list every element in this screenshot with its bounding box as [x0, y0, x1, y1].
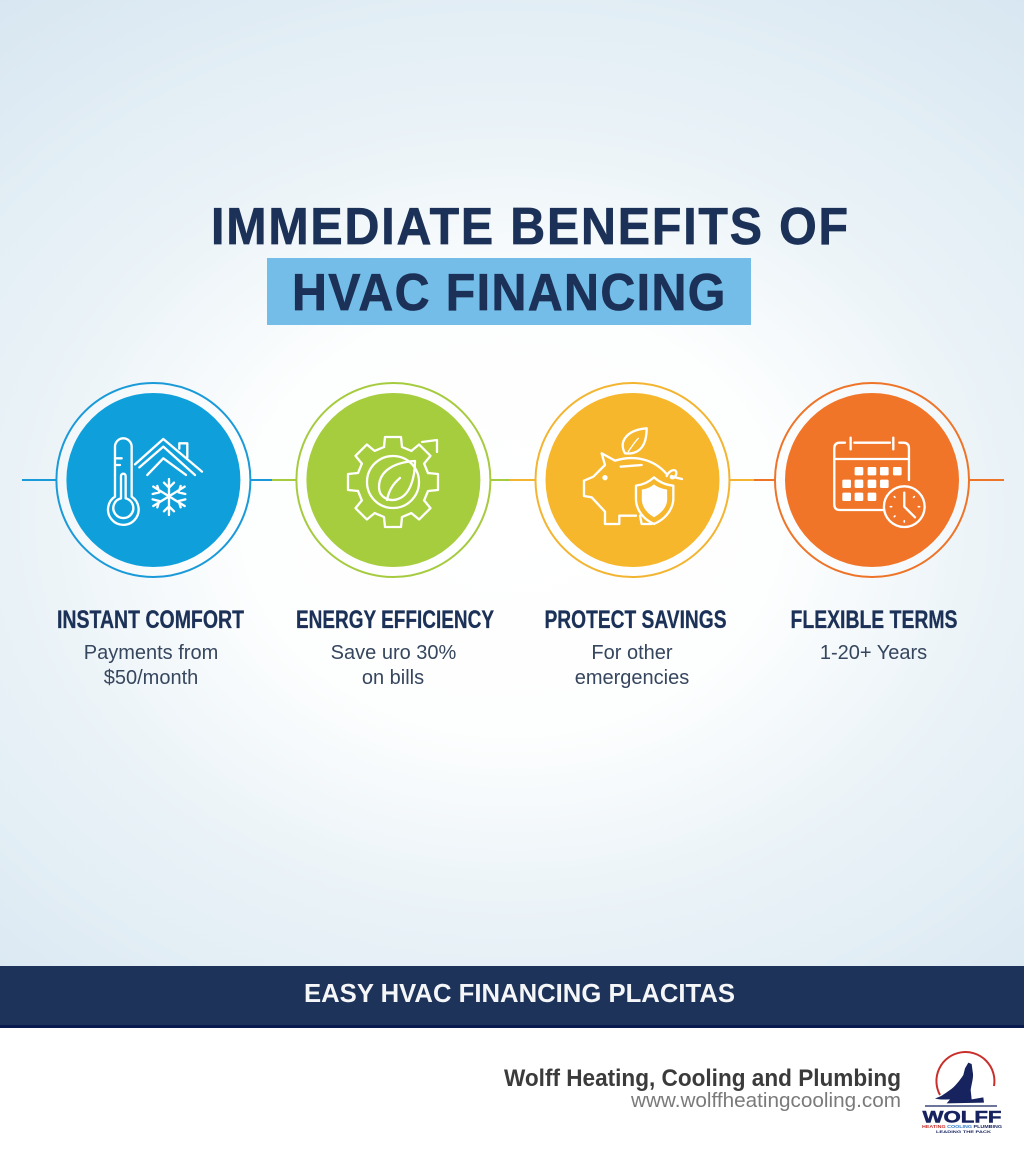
title line 1: IMMEDIATE BENEFITS OF: [211, 197, 848, 255]
wolf silhouette: [935, 1063, 984, 1103]
logo: Wolff: WOLFF: [922, 1108, 1002, 1126]
connector line: [22, 479, 1004, 481]
title: [211, 197, 848, 325]
caption: energy efficiency: ENERGY EFFICIENCY: [296, 606, 494, 634]
caption: protect savings: [544, 606, 726, 689]
caption: instant comfort: INSTANT COMFORT: [57, 606, 244, 634]
caption: energy efficiency: on bills: [362, 667, 424, 689]
caption: protect savings: emergencies: [575, 667, 689, 689]
caption: protect savings: PROTECT SAVINGS: [544, 606, 726, 634]
benefit: flexible terms circle: [775, 383, 969, 577]
benefit: energy efficiency circle: [296, 383, 490, 577]
caption: instant comfort: $50/month: [104, 667, 198, 689]
benefit: instant comfort circle: [56, 383, 250, 577]
caption: energy efficiency: Save uro 30%: [331, 642, 457, 664]
caption: flexible terms: [790, 606, 958, 664]
caption: energy efficiency: [296, 606, 494, 689]
footer company text: Wolff Heating, Cooling and Plumbing: [504, 1065, 901, 1092]
title highlight: [267, 258, 751, 325]
icon: calendar with clock: [834, 438, 925, 527]
icon: gear with leaf: [348, 437, 438, 527]
icon: piggy bank with shield and leaf: [584, 428, 682, 524]
caption: flexible terms: FLEXIBLE TERMS: [790, 606, 958, 634]
banner text: EASY HVAC FINANCING PLACITAS: [304, 978, 735, 1008]
caption: instant comfort: Payments from: [84, 642, 218, 664]
caption: protect savings: For other: [591, 642, 673, 664]
title line 2: HVAC FINANCING: [292, 263, 725, 321]
footer background: [0, 1028, 1024, 1154]
logo: Wolff: HEATING COOLING PLUMBING: [922, 1124, 1003, 1129]
benefit: protect savings circle: [536, 383, 730, 577]
icon: thermometer, house and snowflake: [108, 438, 202, 525]
logo: Wolff: [922, 1052, 1003, 1134]
banner: [0, 966, 1024, 1028]
logo: Wolff: LEADING THE PACK: [936, 1129, 991, 1134]
footer company text: [504, 1065, 901, 1112]
caption: instant comfort: [57, 606, 244, 689]
caption: flexible terms: 1-20+ Years: [820, 642, 927, 664]
footer company text: www.wolffheatingcooling.com: [630, 1090, 901, 1112]
